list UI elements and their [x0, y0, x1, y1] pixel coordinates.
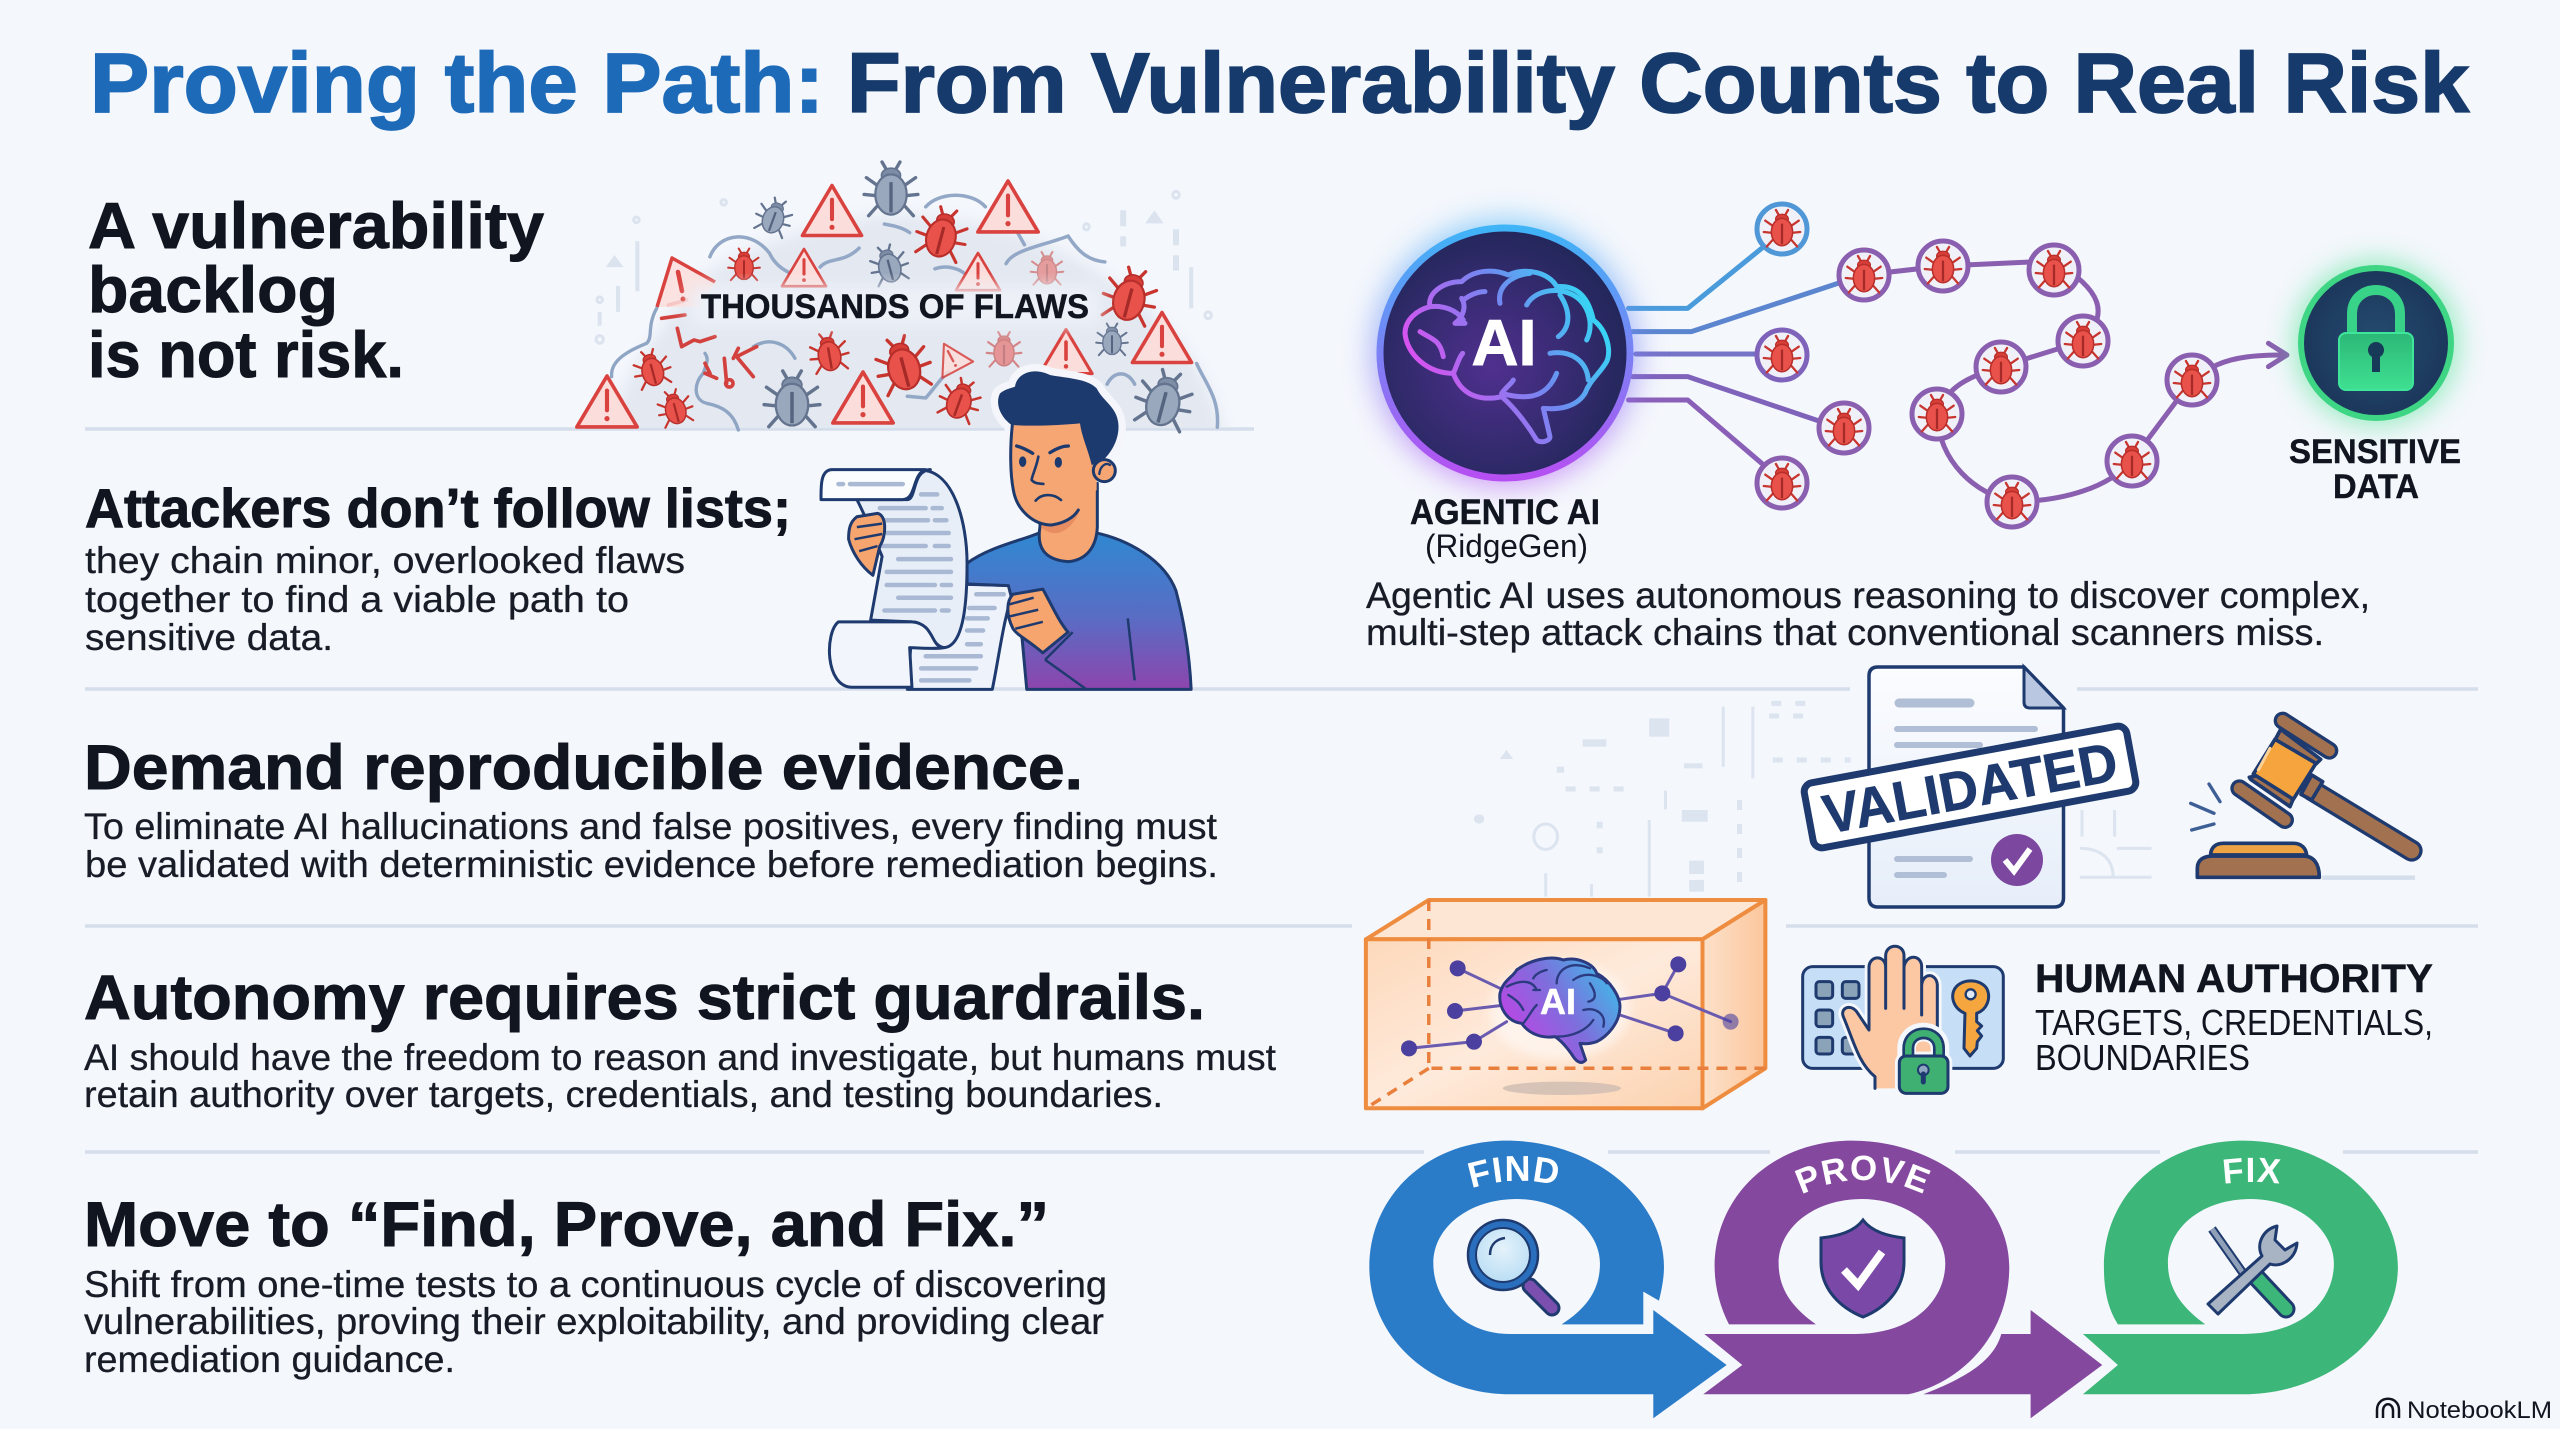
- icon: wrench and screwdriver: [2208, 1226, 2297, 1314]
- hand: [1843, 946, 1937, 1088]
- warning triangles: [577, 181, 1192, 427]
- text block: agentic AI description: multi-step attack chains that conventional scanners miss.: [1366, 612, 2324, 653]
- back paper and shirt: [907, 532, 1191, 689]
- text block: attackers: sensitive data.: [85, 617, 333, 658]
- scroll and hands: [821, 470, 1068, 687]
- text block: find prove fix: vulnerabilities, proving their exploitability, and providing clear: [84, 1301, 1104, 1342]
- watermark: NotebookLM: NotebookLM: [2407, 1397, 2552, 1424]
- attack chain nodes: [1757, 204, 2217, 527]
- heading: backlog: A vulnerability: [88, 189, 544, 262]
- text block: guardrails: AI should have the freedom to reason and investigate, but humans must: [84, 1037, 1277, 1078]
- arrow: fix: FIX: [2224, 1158, 2281, 1184]
- text block: guardrails: [84, 963, 1277, 1115]
- title: Proving the Path:: [90, 36, 824, 130]
- text block: guardrails: retain authority over targets, credentials, and testing boundaries.: [84, 1074, 1163, 1115]
- text block: human authority: [2035, 957, 2433, 1078]
- illustration: frustrated man reading scroll: [821, 371, 1191, 689]
- label: prove: [1788, 1180, 1938, 1202]
- label: sensitive data: SENSITIVE: [2289, 433, 2461, 471]
- text block: human authority: BOUNDARIES: [2035, 1037, 2250, 1078]
- title: [90, 36, 2469, 130]
- arrow: fix: [2083, 1140, 2398, 1394]
- label: sensitive data: [2289, 433, 2461, 506]
- arrow: prove: PROVE: [1794, 1156, 1931, 1194]
- icon: shield: [1821, 1220, 1904, 1317]
- text block: attackers: they chain minor, overlooked flaws: [85, 540, 685, 581]
- label: agentic AI: (RidgeGen): [1425, 528, 1588, 564]
- head: [998, 371, 1119, 562]
- title: From Vulnerability Counts to Real Risk: [847, 36, 2469, 130]
- label: agentic AI: [1410, 493, 1600, 564]
- icon: sandbox box with AI: [1366, 900, 1765, 1108]
- AI label small: AI: [1540, 981, 1576, 1022]
- check badge: [1991, 834, 2043, 886]
- cloud outlines: [710, 195, 1218, 427]
- key: [1953, 981, 1989, 1056]
- AI label: AI: [1472, 306, 1536, 379]
- text block: evidence: be validated with deterministic evidence before remediation begins.: [85, 844, 1218, 885]
- illustration: pile of flaws: [577, 162, 1225, 440]
- label: sensitive data: DATA: [2333, 468, 2419, 506]
- heading: backlog: backlog: [88, 253, 338, 326]
- icon: sensitive data lock: [2294, 261, 2458, 425]
- text block: find prove fix: Move to “Find, Prove, and Fix.”: [84, 1190, 1049, 1260]
- arrow: find: [1369, 1140, 1726, 1418]
- text block: guardrails: Autonomy requires strict guardrails.: [84, 963, 1205, 1033]
- text block: find prove fix: [84, 1190, 1107, 1380]
- label: thousands of flaws: THOUSANDS OF FLAWS: [701, 288, 1089, 326]
- label: find: [1462, 1181, 1568, 1192]
- icon: agentic AI orb: [1371, 219, 1639, 487]
- arrow: prove: [1703, 1140, 2102, 1418]
- text block: find prove fix: Shift from one-time tests to a continuous cycle of discovering: [84, 1264, 1107, 1305]
- text block: evidence: To eliminate AI hallucinations and false positives, every finding must: [84, 806, 1218, 847]
- validated stamp: VALIDATED: [1818, 730, 2122, 846]
- brain and network: [1401, 956, 1739, 1062]
- arrow: find: FIND: [1468, 1156, 1558, 1188]
- brain outline: [1405, 271, 1609, 442]
- icon: gavel: [2191, 721, 2415, 878]
- icon: human authority hand and key: [1803, 946, 2003, 1093]
- text block: evidence: Demand reproducible evidence.: [84, 733, 1083, 803]
- faint background marks: [596, 191, 1211, 343]
- text block: human authority: HUMAN AUTHORITY: [2035, 957, 2433, 1001]
- heading: backlog: [88, 189, 544, 391]
- attack paths: [1629, 248, 2287, 502]
- box: [1366, 900, 1765, 1108]
- label: fix: [2212, 1182, 2292, 1186]
- text block: agentic AI description: [1366, 575, 2370, 653]
- heading: backlog: is not risk.: [88, 318, 404, 391]
- cracks: [662, 300, 757, 387]
- icon: validated document: [1803, 667, 2137, 907]
- text block: find prove fix: remediation guidance.: [84, 1339, 455, 1380]
- text block: attackers: together to find a viable path to: [85, 579, 629, 620]
- bugs: [629, 162, 1198, 433]
- text block: attackers: Attackers don’t follow lists;: [85, 477, 791, 539]
- label: agentic AI: AGENTIC AI: [1410, 493, 1600, 532]
- icon: magnifier: [1468, 1220, 1552, 1308]
- text block: evidence: [84, 733, 1218, 885]
- lock: [1907, 1032, 1940, 1058]
- text block: human authority: TARGETS, CREDENTIALS,: [2035, 1002, 2433, 1043]
- text block: attackers: [85, 477, 791, 658]
- faint circuit background: [1474, 703, 2152, 897]
- text block: agentic AI description: Agentic AI uses autonomous reasoning to discover complex,: [1366, 575, 2370, 616]
- label band: [690, 286, 1100, 326]
